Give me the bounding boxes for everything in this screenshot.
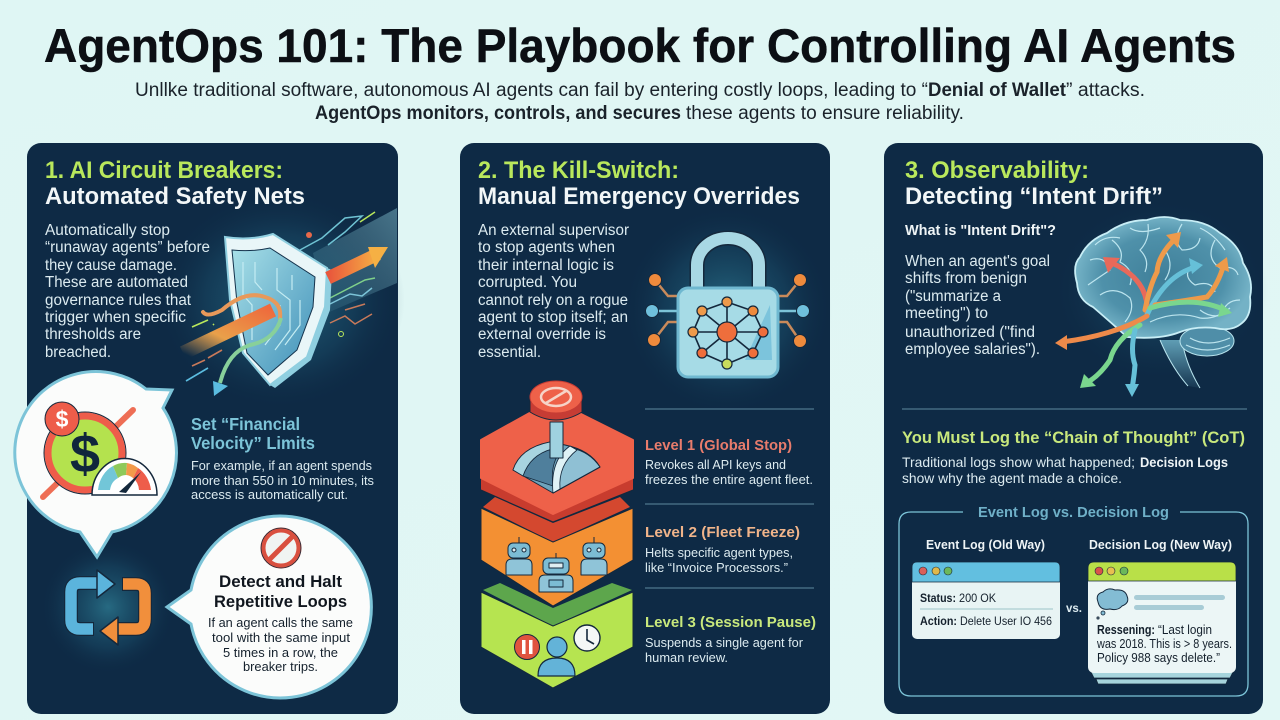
- text: chain of thought: You Must Log the “Chain of Thought” (CoT): [902, 428, 1245, 447]
- text: kill switch description: to stop agents when: [478, 239, 615, 256]
- text: circuit breaker description: trigger when specific: [45, 309, 186, 326]
- heading: circuit breakers: 1. AI Circuit Breakers:: [45, 157, 283, 184]
- text: what is intent drift: ("summarize a: [905, 288, 1001, 305]
- text: level 2 fleet freeze: Helts specific agent types,: [645, 545, 793, 560]
- layer: global stop with lever: [481, 381, 633, 522]
- text: circuit breaker description: These are automated: [45, 274, 188, 291]
- comparison box: event log vs decision log: [899, 504, 1248, 696]
- text: financial velocity limits: more than 550 in 10 minutes, its: [191, 473, 374, 488]
- text: kill switch description: essential.: [478, 344, 541, 361]
- text: financial velocity limits: For example, if an agent spends: [191, 458, 372, 473]
- text: detect and halt: Detect and Halt: [219, 572, 342, 591]
- text: what is intent drift: What is "Intent Drift"?: [905, 223, 1056, 239]
- divider line: [902, 408, 1247, 410]
- text: level 1 global stop: freezes the entire agent fleet.: [645, 472, 813, 487]
- text: circuit breaker description: “runaway agents” before: [45, 239, 210, 256]
- window: event log: Status:: [920, 591, 956, 605]
- text: level 2 fleet freeze: [645, 524, 800, 575]
- divider lines: [645, 409, 814, 588]
- text: kill switch description: cannot rely on a rogue: [478, 292, 628, 309]
- subtitle: [135, 80, 1145, 124]
- text: kill switch description: corrupted. You: [478, 274, 577, 291]
- callout bubble: financial velocity icon: [15, 372, 176, 557]
- panel: AI circuit breakers: [15, 143, 405, 714]
- text: level 1 global stop: Level 1 (Global Stop): [645, 437, 792, 454]
- text: chain of thought: [902, 428, 1245, 486]
- icon: prohibited sign: [261, 528, 301, 568]
- heading: kill switch: 2. The Kill-Switch:: [478, 157, 679, 184]
- subtitle: ” attacks.: [1066, 80, 1145, 101]
- icon: brain with diverging arrows: [1052, 198, 1268, 397]
- text: level 3 session pause: human review.: [645, 650, 728, 665]
- window: event log: [912, 562, 1060, 639]
- text: detect and halt: If an agent calls the same: [208, 615, 353, 630]
- layer: fleet freeze: [481, 497, 633, 606]
- text: level 1 global stop: Revokes all API keys and: [645, 457, 786, 472]
- graphic: three-level kill switch stack: [481, 381, 633, 688]
- window: decision log: Policy 988 says delete.”: [1097, 651, 1220, 665]
- text: chain of thought: Traditional logs show what happened;: [902, 454, 1135, 470]
- icon: thought cloud: [1096, 589, 1128, 620]
- icon: dollar with gauge: $: [70, 424, 100, 484]
- subtitle: Unllke traditional software, autonomous AI agents can fail by entering costly loops, leading to “: [135, 80, 928, 101]
- text: financial velocity limits: [191, 414, 374, 502]
- text: financial velocity limits: access is automatically cut.: [191, 487, 348, 502]
- comparison title: Event Log vs. Decision Log: [978, 504, 1169, 521]
- text: financial velocity limits: Velocity” Limits: [191, 433, 315, 453]
- text: circuit breaker description: governance rules that: [45, 292, 192, 309]
- icon: lever and stop button: [513, 381, 600, 493]
- text: what is intent drift: employee salaries").: [905, 341, 1040, 358]
- heading: circuit breakers: Automated Safety Nets: [45, 183, 305, 210]
- text: level 3 session pause: Level 3 (Session Pause): [645, 614, 816, 631]
- subtitle: AgentOps monitors, controls, and secures: [315, 103, 681, 124]
- text: detect and halt: [208, 572, 353, 674]
- text: circuit breaker description: [45, 222, 210, 361]
- window: event log: Delete User IO 456: [960, 614, 1052, 628]
- icon: padlock with network: [646, 238, 810, 377]
- icon: robots: [506, 537, 607, 592]
- icon: repetitive loop arrows: [71, 570, 145, 645]
- icon: dollar with gauge: [43, 402, 157, 497]
- text: what is intent drift: meeting") to: [905, 305, 988, 322]
- window: decision log: Ressening:: [1097, 623, 1155, 637]
- text: what is intent drift: unauthorized ("find: [905, 324, 1035, 341]
- text: detect and halt: Repetitive Loops: [214, 592, 347, 611]
- text: level 2 fleet freeze: like “Invoice Processors.”: [645, 560, 788, 575]
- heading: kill switch: [478, 157, 800, 210]
- text: what is intent drift: When an agent's goal: [905, 253, 1050, 270]
- window: event log: 200 OK: [959, 591, 996, 605]
- text: kill switch description: external override is: [478, 326, 606, 343]
- callout bubble: detect and halt loops: [167, 516, 371, 698]
- text: kill switch description: [478, 222, 629, 361]
- text: circuit breaker description: breached.: [45, 344, 111, 361]
- text: level 3 session pause: [645, 614, 816, 665]
- text: chain of thought: Decision Logs: [1140, 454, 1228, 470]
- text: kill switch description: agent to stop itself; an: [478, 309, 628, 326]
- icon: dollar with gauge: $: [56, 406, 69, 432]
- text: detect and halt: 5 times in a row, the: [223, 645, 338, 660]
- panel: kill switch: [460, 143, 832, 714]
- text: detect and halt: breaker trips.: [243, 659, 318, 674]
- text: what is intent drift: [905, 223, 1056, 358]
- label: vs: vs.: [1066, 601, 1082, 615]
- text: detect and halt: tool with the same input: [212, 630, 350, 645]
- heading: kill switch: Manual Emergency Overrides: [478, 183, 800, 210]
- heading: observability: Detecting “Intent Drift”: [905, 183, 1163, 210]
- icon: shield blocking runaway arrow: [183, 208, 397, 396]
- text: level 1 global stop: [645, 437, 813, 487]
- text: circuit breaker description: Automatically stop: [45, 222, 170, 239]
- text: level 3 session pause: Suspends a single agent for: [645, 635, 804, 650]
- window: decision log: was 2018. This is > 8 years.: [1096, 637, 1232, 651]
- text: level 2 fleet freeze: Level 2 (Fleet Freeze): [645, 524, 800, 541]
- window: event log: Action:: [920, 614, 957, 628]
- text: what is intent drift: shifts from benign: [905, 270, 1027, 287]
- text: circuit breaker description: thresholds are: [45, 326, 141, 343]
- heading: observability: 3. Observability:: [905, 157, 1089, 184]
- text: financial velocity limits: Set “Financial: [191, 414, 300, 434]
- subtitle: these agents to ensure reliability.: [686, 103, 964, 124]
- window: decision log: “Last login: [1158, 623, 1212, 637]
- heading: observability: [905, 157, 1163, 210]
- column heading: event log: Event Log (Old Way): [926, 538, 1045, 552]
- heading: circuit breakers: [45, 157, 305, 210]
- text: kill switch description: their internal logic is: [478, 257, 614, 274]
- text: chain of thought: show why the agent made a choice.: [902, 470, 1122, 486]
- column heading: decision log: Decision Log (New Way): [1089, 538, 1232, 552]
- layer: session pause: [481, 583, 633, 688]
- title: AgentOps 101: The Playbook for Controlling AI Agents: [44, 19, 1236, 72]
- window: decision log: [1088, 562, 1236, 684]
- subtitle: Denial of Wallet: [928, 80, 1067, 101]
- text: kill switch description: An external supervisor: [478, 222, 629, 239]
- panel: observability: [884, 143, 1268, 714]
- text: circuit breaker description: they cause damage.: [45, 257, 177, 274]
